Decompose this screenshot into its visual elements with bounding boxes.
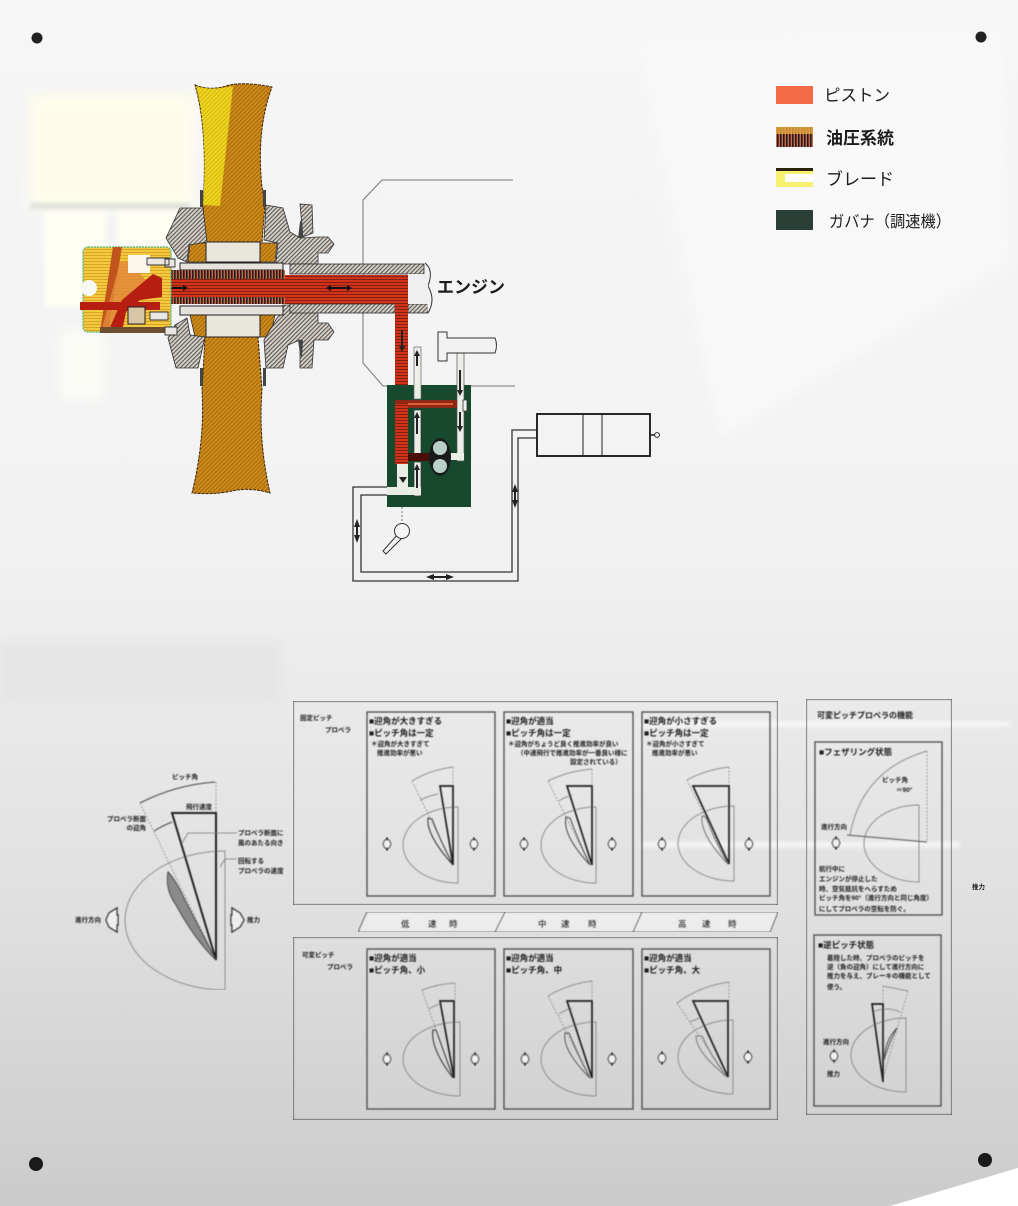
card: medium speed fixed <box>504 712 633 896</box>
card: low speed fixed: 推進効率が悪い <box>377 748 423 757</box>
engine label: エンジン <box>437 278 505 297</box>
hub barrel lower <box>168 305 334 386</box>
card: low speed variable: ■ピッチ角、小 <box>369 965 426 975</box>
card: low speed fixed: ＊迎角が大きすぎて <box>371 739 430 748</box>
rotation ellipse <box>125 851 225 990</box>
card: medium speed fixed: ■迎角が適当 <box>506 716 554 726</box>
card: high speed fixed <box>642 712 770 896</box>
blade lower <box>192 337 270 494</box>
shaft arrows <box>162 285 352 291</box>
speed band: 中 <box>538 919 547 929</box>
card: high speed fixed: 推進効率が悪い <box>652 748 698 757</box>
legend: governor: ガバナ（調速機） <box>829 213 951 231</box>
relief valve <box>387 464 421 495</box>
blade root cups <box>188 242 277 337</box>
card: medium speed fixed: （中速飛行で推進効率が一番良い様に <box>517 748 628 757</box>
pitch line <box>140 782 216 960</box>
card: medium speed fixed: ■ピッチ角は一定 <box>506 728 571 738</box>
channel arrows <box>399 330 463 488</box>
hydraulic branch <box>395 400 467 464</box>
blade section <box>167 872 216 960</box>
legend: governor <box>776 210 951 231</box>
panel: fixed pitch propeller <box>293 701 778 905</box>
card: low speed fixed: ■迎角が大きすぎる <box>369 716 442 726</box>
hydraulic splines <box>160 270 285 279</box>
card: high speed fixed: ■迎角が小さすぎる <box>644 716 717 726</box>
pitch angle arc <box>140 782 215 803</box>
panel: variable pitch propeller <box>293 937 778 1120</box>
angle of attack arc <box>154 822 172 831</box>
card: feathering: 航行中に <box>819 864 845 873</box>
oil channel white upper <box>414 347 421 399</box>
card: high speed fixed: ＊迎角が小さすぎて <box>646 739 704 748</box>
legend: piston <box>776 86 890 105</box>
card: high speed variable <box>642 949 770 1109</box>
legend: hydraulic system: 油圧系統 <box>826 129 894 148</box>
card: reverse pitch: 使う。 <box>827 982 846 991</box>
speed band: 速 <box>702 919 711 929</box>
lever <box>383 524 410 554</box>
control rod <box>438 332 496 361</box>
governor body <box>387 385 471 507</box>
legend: hydraulic system <box>776 127 894 148</box>
labels: 回転する <box>238 856 264 865</box>
gear pump <box>429 438 451 476</box>
card: feathering: ＝90° <box>896 786 913 794</box>
arrows <box>106 908 244 932</box>
card: reverse pitch: 着陸した時、プロペラのピッチを <box>827 953 924 962</box>
card: low speed variable: ■迎角が適当 <box>369 953 417 963</box>
card: feathering: 進行方向 <box>821 822 847 831</box>
labels: プロペラ断面に <box>238 828 284 837</box>
stray thrust label: 推力 <box>972 882 985 891</box>
heading: propeller: プロペラ <box>327 963 353 971</box>
panel heading: 可変ピッチプロペラの機能 <box>817 710 913 720</box>
hub flange fins <box>298 218 303 358</box>
legend: piston: ピストン <box>824 87 890 105</box>
card: medium speed variable: ■ピッチ角、中 <box>506 965 562 975</box>
card: feathering: にしてプロペラの空転を防ぐ。 <box>819 904 910 913</box>
propeller hub cross-section <box>80 84 432 494</box>
speed band: 低 <box>401 919 410 929</box>
card: reverse pitch: 推力を与え、ブレーキの機能として <box>827 971 931 980</box>
labels: 推力 <box>247 915 260 924</box>
labels: の迎角 <box>126 823 146 832</box>
heading: fixed pitch: 固定ピッチ <box>300 714 333 722</box>
labels: 進行方向 <box>75 915 101 924</box>
labels: 風のあたる向き <box>238 838 284 847</box>
card: medium speed variable <box>504 949 633 1109</box>
card: feathering: ■フェザリング状態 <box>819 747 893 757</box>
labels: ピッチ角 <box>172 772 198 781</box>
speed band: 時 <box>588 919 597 929</box>
card: medium speed fixed: 設定されている） <box>570 757 622 766</box>
speed band <box>358 912 778 932</box>
card: reverse pitch: 逆（負の迎角）にして進行方向に <box>827 962 924 971</box>
card: medium speed fixed: ＊迎角がちょうど良く推進効率が良い <box>508 739 619 748</box>
pipe arrows <box>354 484 518 580</box>
card: medium speed variable: ■迎角が適当 <box>506 953 554 963</box>
accumulator cylinder <box>537 414 659 456</box>
legend <box>776 86 951 231</box>
legend: blade <box>776 168 894 189</box>
blade upper <box>195 84 272 242</box>
labels <box>75 772 284 924</box>
hydraulic oil passage <box>160 275 408 404</box>
leader lines <box>182 833 237 867</box>
labels: プロペラ断面 <box>107 814 146 823</box>
hub barrel upper <box>166 190 334 270</box>
card: feathering: ピッチ角を90°（進行方向と同じ角度） <box>819 893 933 902</box>
card: reverse pitch: 推力 <box>827 1069 840 1078</box>
engine outline <box>363 180 515 386</box>
velocity triangle <box>172 813 216 960</box>
card: reverse pitch: ■逆ピッチ状態 <box>818 940 875 950</box>
heading: propeller: プロペラ <box>325 726 351 734</box>
card: high speed variable: ■ピッチ角、大 <box>644 965 701 975</box>
card: feathering <box>815 742 942 915</box>
panel: variable pitch functions <box>806 699 952 1115</box>
speed band: 速 <box>561 919 570 929</box>
labels: プロペラの速度 <box>238 866 284 875</box>
card: low speed fixed: ■ピッチ角は一定 <box>369 728 434 738</box>
card: reverse pitch <box>814 935 941 1106</box>
hydraulic pipe to accumulator <box>353 430 537 581</box>
card: low speed fixed <box>367 712 495 896</box>
engine shaft hatching <box>290 263 432 313</box>
card: reverse pitch: 進行方向 <box>823 1037 849 1046</box>
card: high speed fixed: ■ピッチ角は一定 <box>644 728 709 738</box>
labels: 飛行速度 <box>186 802 212 811</box>
card: feathering: ピッチ角 <box>882 775 908 784</box>
card: low speed variable <box>367 949 495 1109</box>
heading: variable pitch: 可変ピッチ <box>302 950 335 959</box>
card: high speed variable: ■迎角が適当 <box>644 953 692 963</box>
governor unit <box>383 330 496 554</box>
legend: blade: ブレード <box>826 169 894 189</box>
speed band: 時 <box>449 919 458 929</box>
card: feathering: 時、空気抵抗をへらすため <box>819 884 897 893</box>
large airfoil diagram <box>75 772 284 990</box>
speed band: 時 <box>728 919 737 929</box>
speed band: 速 <box>428 919 437 929</box>
sleeves <box>180 263 283 270</box>
oil inlet stem <box>401 507 403 524</box>
propeller piston nose <box>80 247 177 335</box>
card: feathering: エンジンが停止した <box>819 874 878 883</box>
speed band: 高 <box>678 919 687 929</box>
